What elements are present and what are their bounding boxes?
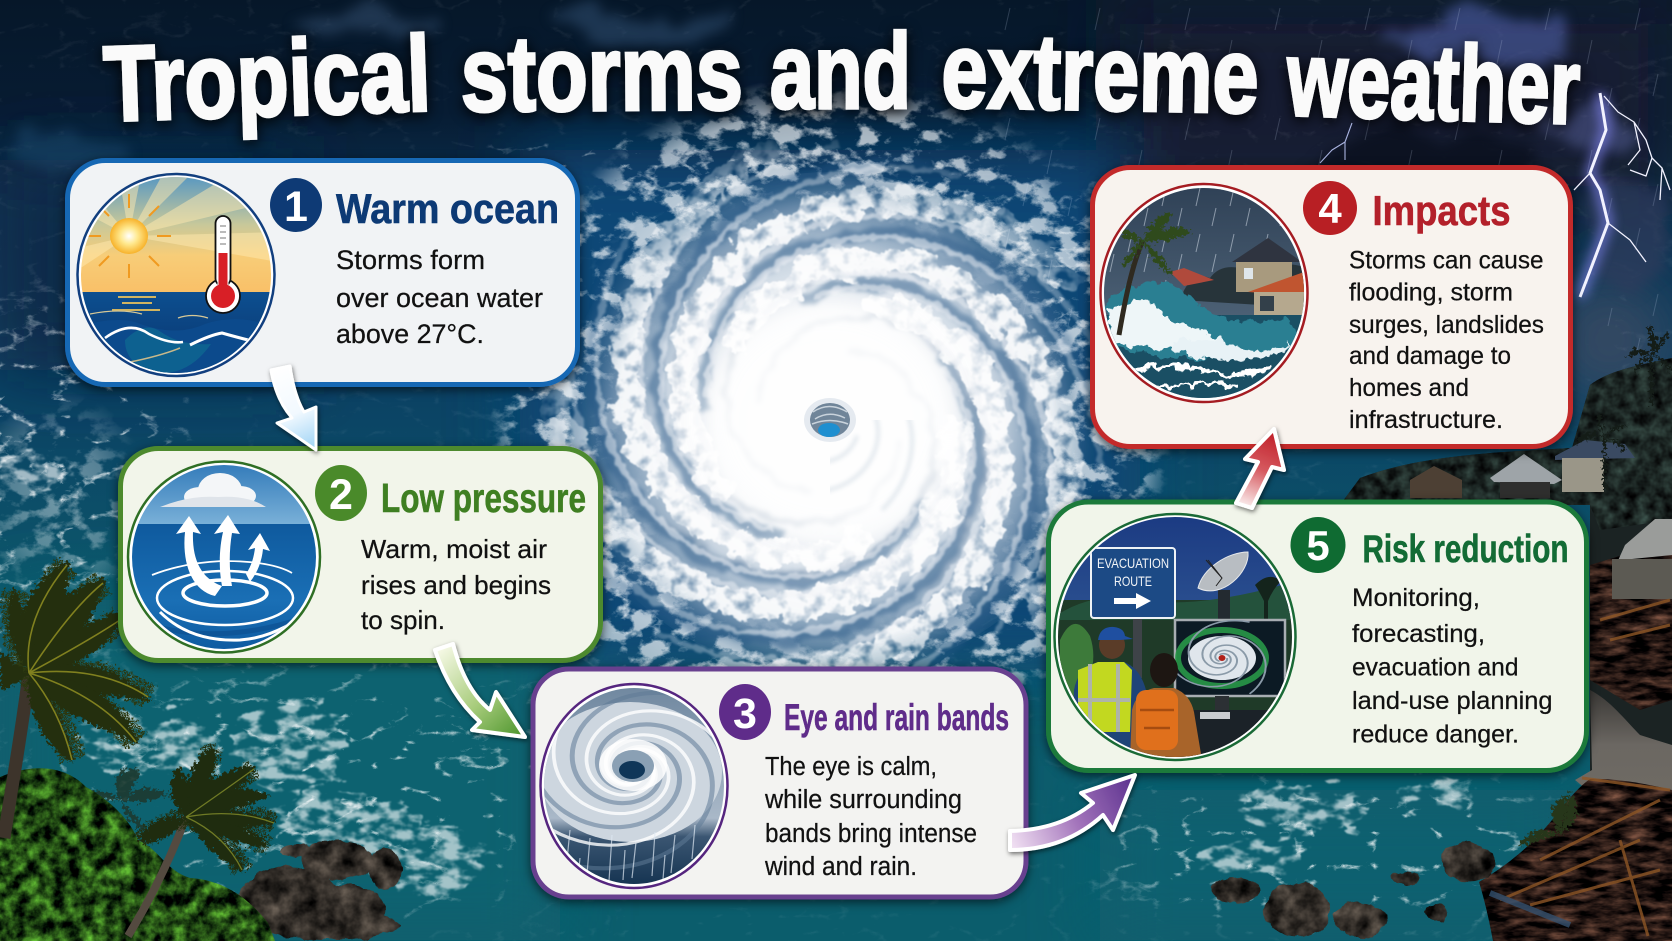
panel: step 5 risk reduction xyxy=(1048,502,1586,770)
houses xyxy=(1170,238,1304,318)
body text: Storms form xyxy=(336,245,485,275)
badge 5: 5 xyxy=(1306,522,1330,569)
background: storm clouds and rain xyxy=(0,0,1672,350)
title xyxy=(102,10,1582,147)
panel: step 4 impacts xyxy=(1092,168,1570,446)
foliage bush xyxy=(0,768,275,941)
body text: and damage to xyxy=(1349,342,1511,370)
shoreline rocks xyxy=(1211,842,1494,938)
body text xyxy=(1349,246,1544,434)
surf foam swaths xyxy=(0,452,1480,895)
monitor xyxy=(1165,608,1285,760)
arrow: step 2 to step 3 xyxy=(435,644,525,737)
arrow: step 3 to step 5 xyxy=(1010,775,1135,850)
heading: impacts: Impacts xyxy=(1372,187,1510,234)
title: Tropical xyxy=(102,13,433,144)
badge 4 xyxy=(1303,181,1357,235)
radar dish xyxy=(1198,552,1248,622)
body text: The eye is calm, xyxy=(765,753,937,781)
small palms right xyxy=(1575,326,1670,490)
body text: over ocean water xyxy=(336,283,543,313)
title: storms xyxy=(460,12,743,134)
title: extreme xyxy=(941,10,1260,136)
badge 2 xyxy=(315,465,367,521)
hurricane satellite swirl xyxy=(538,138,1106,666)
body text: rises and begins xyxy=(361,570,551,600)
panel: step 1 warm ocean xyxy=(68,160,578,384)
palm xyxy=(1119,240,1143,335)
badge 5 xyxy=(1290,517,1346,573)
panel: step 2 low pressure xyxy=(120,448,600,660)
body text: forecasting, xyxy=(1352,620,1485,648)
body text: land-use planning xyxy=(1352,687,1552,715)
person with backpack xyxy=(1130,653,1202,760)
arrow: step 1 to step 2 xyxy=(271,366,316,450)
body text xyxy=(336,245,543,349)
badge 1: 1 xyxy=(284,183,308,231)
body text: wind and rain. xyxy=(764,853,917,881)
hurricane eye xyxy=(804,398,856,442)
evacuation sign: EVACUATION xyxy=(1097,555,1169,571)
badge 3: 3 xyxy=(733,690,757,738)
body text: Warm, moist air xyxy=(361,534,547,564)
badge 1 xyxy=(270,178,322,232)
badge 4: 4 xyxy=(1318,185,1342,232)
palm tree tall xyxy=(0,561,152,838)
body text xyxy=(1352,584,1552,748)
left shore: foliage, rocks and palm trees xyxy=(0,561,401,941)
body text: reduce danger. xyxy=(1352,720,1519,748)
body text: evacuation and xyxy=(1352,654,1518,682)
illustration: sun, sea and thermometer xyxy=(70,170,282,384)
worker in vest xyxy=(1072,627,1150,760)
debris planks xyxy=(1490,600,1670,936)
rocks xyxy=(240,840,401,940)
small background palm xyxy=(85,769,170,835)
house cluster xyxy=(1410,440,1672,599)
heading: warm ocean: Warm ocean xyxy=(336,185,559,232)
illustration: rising air over spinning water xyxy=(125,460,325,652)
illustration: evacuation sign, radar dish and monitoring xyxy=(1050,512,1300,770)
body text xyxy=(361,534,551,635)
illustration: storm surge hitting houses xyxy=(1100,184,1310,405)
icon: cloud xyxy=(160,473,266,507)
storm wave xyxy=(1106,283,1300,388)
body text: Monitoring, xyxy=(1352,584,1480,612)
small bent palm xyxy=(1520,793,1577,847)
evacuation sign: ROUTE xyxy=(1114,573,1152,589)
body text xyxy=(764,753,977,881)
heading: low pressure: Low pressure xyxy=(381,475,586,521)
lightning bolts xyxy=(1320,93,1670,297)
icon: thermometer xyxy=(206,216,240,313)
body text: above 27°C. xyxy=(336,319,484,349)
body text: homes and xyxy=(1349,374,1469,402)
body text: infrastructure. xyxy=(1349,406,1503,434)
body text: to spin. xyxy=(361,605,445,635)
body text: Storms can cause xyxy=(1349,246,1544,274)
badge 3 xyxy=(719,684,771,740)
body text: flooding, storm xyxy=(1349,278,1513,306)
body text: surges, landslides xyxy=(1349,311,1544,339)
panel: step 3 eye and rain bands xyxy=(525,662,1034,908)
background: damaged coastal town xyxy=(1211,326,1672,941)
body text: bands bring intense xyxy=(765,820,977,848)
title: and xyxy=(770,11,911,131)
heading: risk reduction: Risk reduction xyxy=(1362,528,1568,571)
heading: eye and rain bands: Eye and rain bands xyxy=(784,697,1009,738)
arrow: step 5 to step 4 xyxy=(1236,429,1284,508)
badge 2: 2 xyxy=(329,471,353,519)
illustration: storm eye with rain xyxy=(539,682,729,890)
palm tree front xyxy=(128,746,276,936)
body text: while surrounding xyxy=(764,786,962,814)
evacuation sign xyxy=(1091,548,1175,618)
